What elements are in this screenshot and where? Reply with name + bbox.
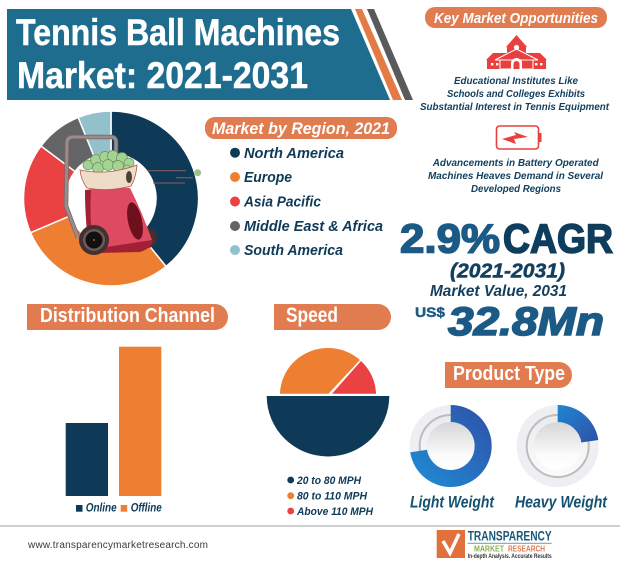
footer: website: www.transparencymarketresearch.com [27,540,208,551]
legend: speed: Above 110 MPH [296,506,374,518]
logo: transparency market research: TRANSPARENCY [468,529,552,544]
title banner: Market: 2021-2031 [17,55,308,96]
legend: regions: North America [244,145,344,162]
icon: battery [496,126,542,149]
legend: distribution channel: Online [86,503,117,515]
text: battery opportunity: Machines Heaves Demand in Several [428,170,604,182]
text: battery opportunity: Developed Regions [471,183,561,195]
illustration: tennis ball machine [66,137,201,255]
legend: regions: Europe [244,169,292,186]
statistic: CAGR: 2.9% [400,216,500,262]
statistic: market value: 32.8Mn [448,300,604,344]
heading: market by region: Market by Region, 2021 [212,119,390,138]
heading: key market opportunities: Key Market Opportunities [434,10,598,27]
heading: speed: Speed [286,304,338,327]
legend: regions [230,145,383,259]
heading: speed [274,304,391,330]
label: light weight: Light Weight [410,492,495,512]
text: educational institutes opportunity: Substantial Interest in Tennis Equipment [420,101,609,113]
legend: regions: Middle East & Africa [244,218,383,235]
pie chart: speed [267,348,389,456]
legend: regions: Asia Pacific [243,194,322,210]
title banner: Tennis Ball Machines [16,12,340,53]
heading: product type: Product Type [453,363,565,385]
logo: transparency market research: In-depth Analysis. Accurate Results [468,553,552,560]
logo: transparency market research: RESEARCH [508,544,545,554]
logo: transparency market research: MARKET [474,544,505,554]
text: market value label: Market Value, 2031 [430,283,567,300]
legend: regions: South America [244,242,343,259]
statistic: market value: US$ [415,304,445,320]
text: educational institutes opportunity [420,75,609,113]
heading: distribution channel: Distribution Channel [40,305,215,327]
legend: distribution channel: Offline [131,503,162,515]
text: battery opportunity: Advancements in Battery Operated [432,157,599,169]
legend: distribution channel [76,503,162,515]
logo: transparency market research [437,529,552,560]
text: battery opportunity [428,157,604,195]
legend: speed [287,475,374,518]
donut: light weight [410,405,492,487]
statistic: CAGR [400,216,613,262]
icon: school building [486,35,547,69]
text: educational institutes opportunity: Educational Institutes Like [454,75,578,87]
legend: speed: 80 to 110 MPH [297,490,368,502]
donut: heavy weight [517,405,599,487]
bar chart: distribution channel [66,347,161,496]
text: educational institutes opportunity: Schools and Colleges Exhibits [447,88,585,100]
title banner [7,9,413,100]
text: forecast period: (2021-2031) [450,260,565,282]
donut chart: market by region [24,111,199,286]
legend: speed: 20 to 80 MPH [296,475,362,487]
